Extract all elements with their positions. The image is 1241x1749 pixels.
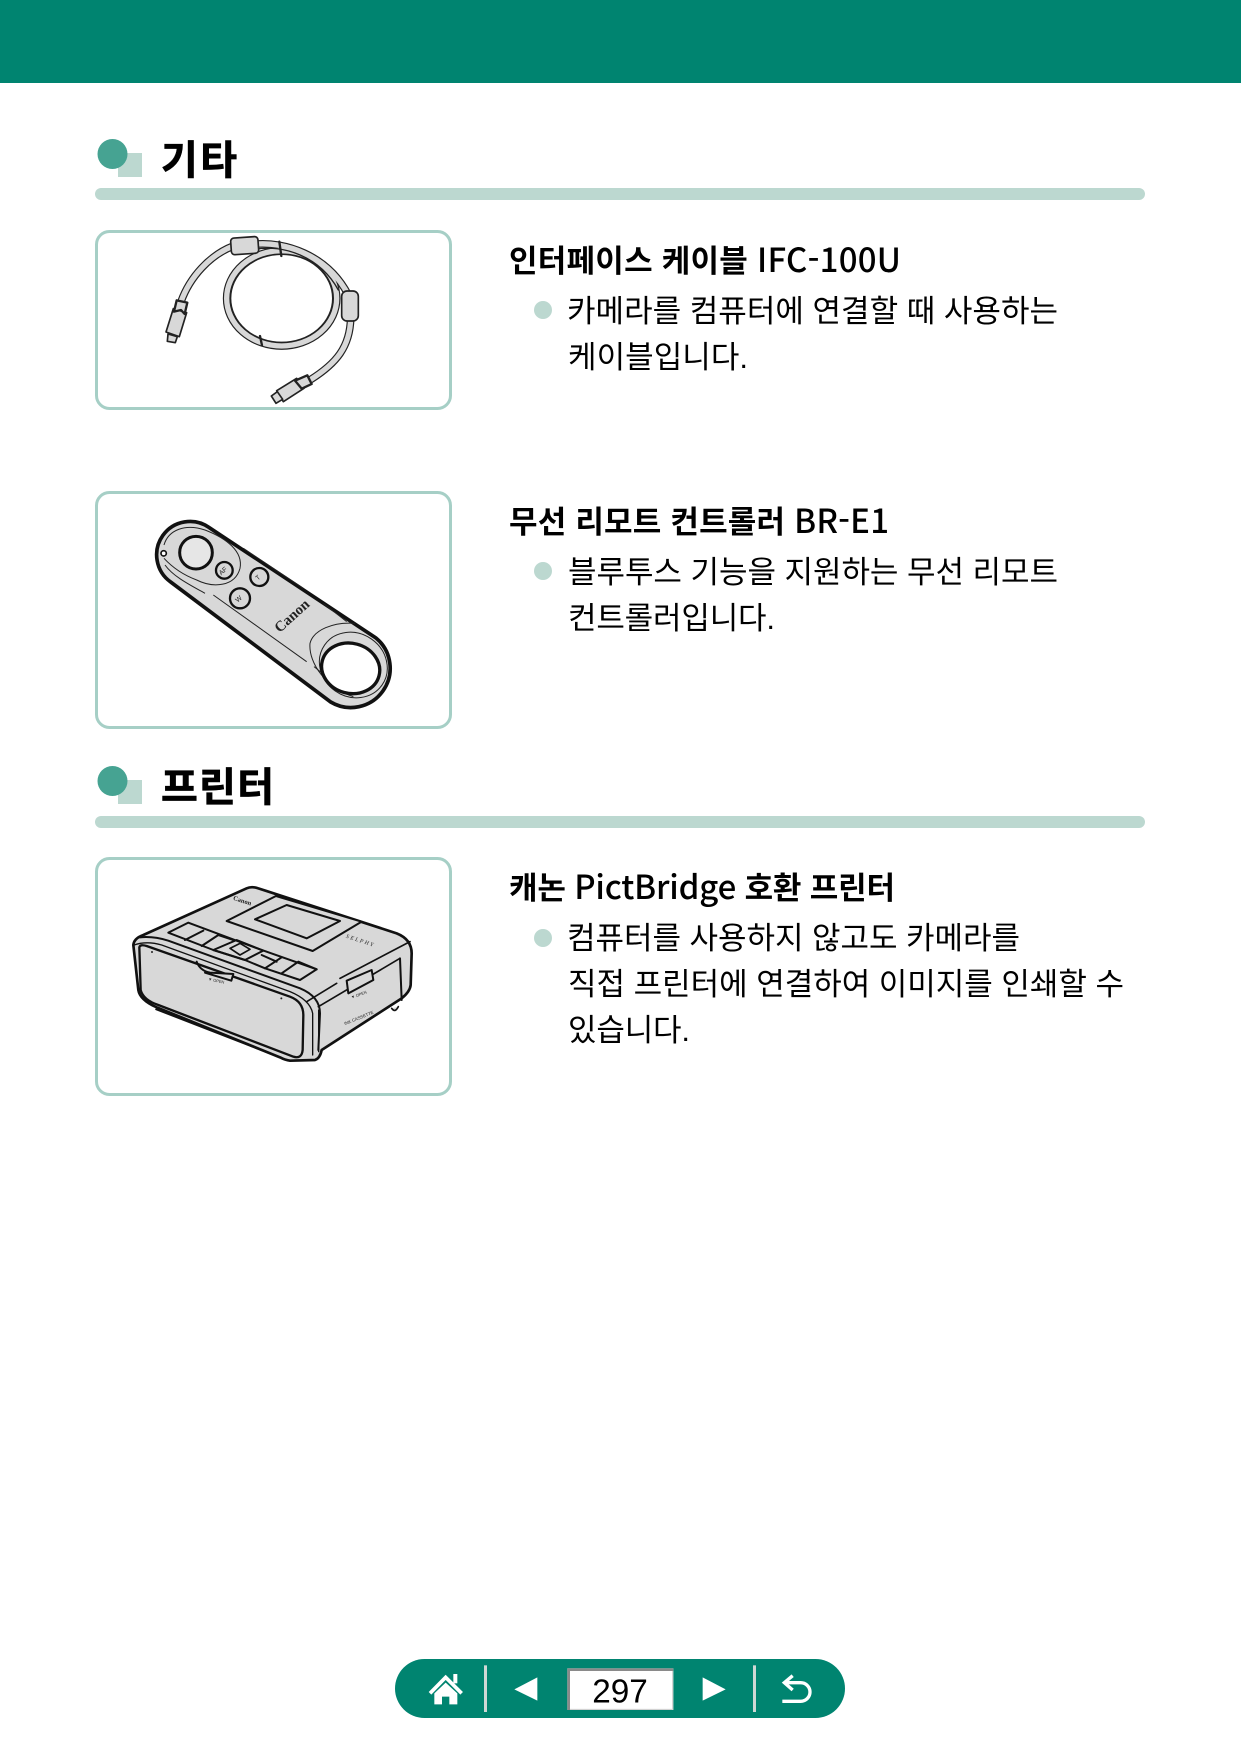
icon: previous arrow	[514, 1677, 537, 1701]
text block: wireless remote: 컨트롤러입니다.	[568, 601, 775, 636]
icon: photo printer	[133, 887, 412, 1061]
text block: PictBridge printer	[509, 861, 1124, 1048]
page number box: 297	[592, 1673, 648, 1710]
icon: remote controller	[157, 521, 400, 711]
text block: wireless remote	[509, 495, 1058, 636]
text block: PictBridge printer: 캐논 PictBridge 호환 프린터	[509, 861, 895, 909]
icon: remote controller: T	[255, 574, 262, 582]
navigation bar	[395, 1659, 845, 1718]
top header band	[0, 0, 1241, 83]
section heading: 프린터	[95, 755, 1145, 828]
text block: PictBridge printer: 컴퓨터를 사용하지 않고도 카메라를	[567, 921, 1020, 956]
text block: wireless remote: 블루투스 기능을 지원하는 무선 리모트	[568, 555, 1058, 590]
icon: return	[782, 1676, 810, 1701]
icon: remote controller: AF	[218, 566, 229, 577]
page number box	[567, 1668, 673, 1710]
text block: interface cable: 케이블입니다.	[568, 340, 748, 375]
icon: home	[430, 1674, 462, 1704]
section heading: 기타	[95, 128, 1145, 200]
icon: remote controller: W	[234, 594, 244, 604]
icon: cable	[166, 236, 358, 403]
panel: wireless remote image	[96, 492, 450, 728]
text block: PictBridge printer: 직접 프린터에 연결하여 이미지를 인쇄할 수	[568, 967, 1124, 1002]
section heading: 기타: 기타	[161, 128, 237, 186]
icon: remote controller: Canon	[272, 597, 313, 636]
text block: PictBridge printer: 있습니다.	[568, 1013, 690, 1048]
icon: photo printer: ▼ OPEN	[350, 989, 367, 1000]
text block: interface cable: 카메라를 컴퓨터에 연결할 때 사용하는	[567, 294, 1058, 329]
icon: photo printer: ▼ OPEN	[208, 976, 225, 985]
panel: interface cable image	[96, 232, 450, 408]
text block: wireless remote: 무선 리모트 컨트롤러 BR-E1	[509, 495, 889, 543]
icon: next arrow	[703, 1677, 726, 1701]
panel: printer image	[96, 858, 450, 1094]
text block: interface cable: 인터페이스 케이블 IFC-100U	[509, 234, 901, 282]
icon: photo printer: Canon	[232, 895, 252, 908]
text block: interface cable	[509, 234, 1058, 375]
icon: photo printer: INK CASSETTE	[343, 1010, 374, 1026]
button strip	[168, 923, 317, 980]
icon: photo printer: SELPHY	[345, 934, 376, 949]
section heading: 프린터: 프린터	[161, 755, 274, 813]
